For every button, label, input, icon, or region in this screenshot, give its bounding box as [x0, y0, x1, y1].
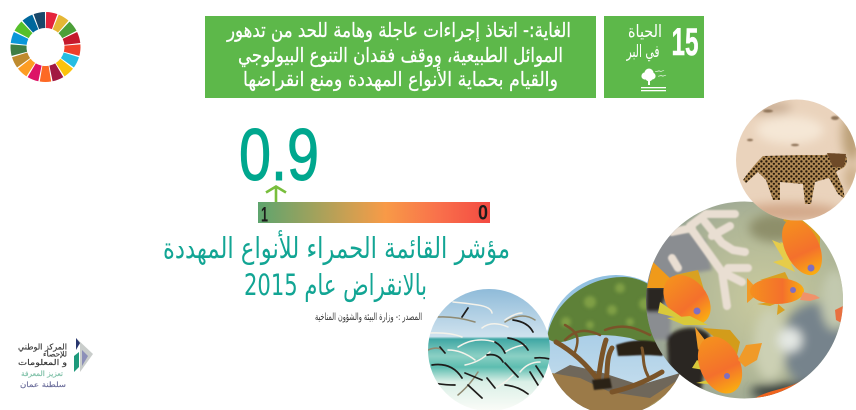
logo text: سلطنة عمان	[20, 381, 66, 389]
leopard figure	[743, 153, 847, 204]
scale bar: 1	[261, 204, 268, 226]
logo text: المركز الوطني	[18, 342, 67, 352]
logo mark	[74, 338, 93, 372]
logo text: تعزيز المعرفة	[21, 370, 63, 378]
panel: goal 15 badge: في البر	[626, 42, 660, 62]
source note: المصدر :- وزارة البيئة والشؤون المناخية	[315, 312, 422, 323]
scale bar	[258, 202, 490, 226]
panel: target statement: والقيام بحماية الأنواع المهددة ومنع انقراضها	[243, 67, 558, 91]
scale bar: 0	[478, 202, 488, 224]
photo: leopard	[736, 99, 856, 221]
panel: target statement: الغاية:- اتخاذ إجراءات عاجلة وهامة للحد من تدهور	[226, 18, 571, 43]
gray rock and dark cavity	[646, 225, 712, 398]
arrow: marker on scale	[266, 186, 286, 203]
icon: SDG colour wheel	[7, 9, 84, 85]
big value 0.9: 0.9	[239, 115, 319, 196]
fish	[647, 212, 845, 405]
panel: goal 15 badge: الحياة	[628, 22, 662, 42]
logo text: للإحصاء	[43, 350, 67, 358]
logo text: و المعلومات	[18, 358, 67, 367]
heading: red list index: بالانقراض عام 2015	[244, 268, 427, 302]
logo text	[18, 342, 67, 389]
logo: national centre for statistics and information	[18, 338, 93, 389]
panel: goal 15 badge	[604, 16, 704, 98]
heading: red list index	[163, 229, 510, 302]
panel: goal 15 badge: 15	[672, 21, 698, 64]
panel: target statement	[205, 16, 596, 98]
photo: seabirds over the beach	[428, 289, 550, 410]
panel: target statement: الموائل الطبيعية، ووقف فقدان التنوع البيولوجي	[238, 43, 563, 68]
heading: red list index: مؤشر القائمة الحمراء للأنواع المهددة	[163, 229, 510, 265]
photo: tree	[546, 275, 690, 410]
icon: tree and birds	[641, 68, 666, 91]
coral	[672, 214, 748, 306]
photo: reef fish	[646, 201, 849, 405]
